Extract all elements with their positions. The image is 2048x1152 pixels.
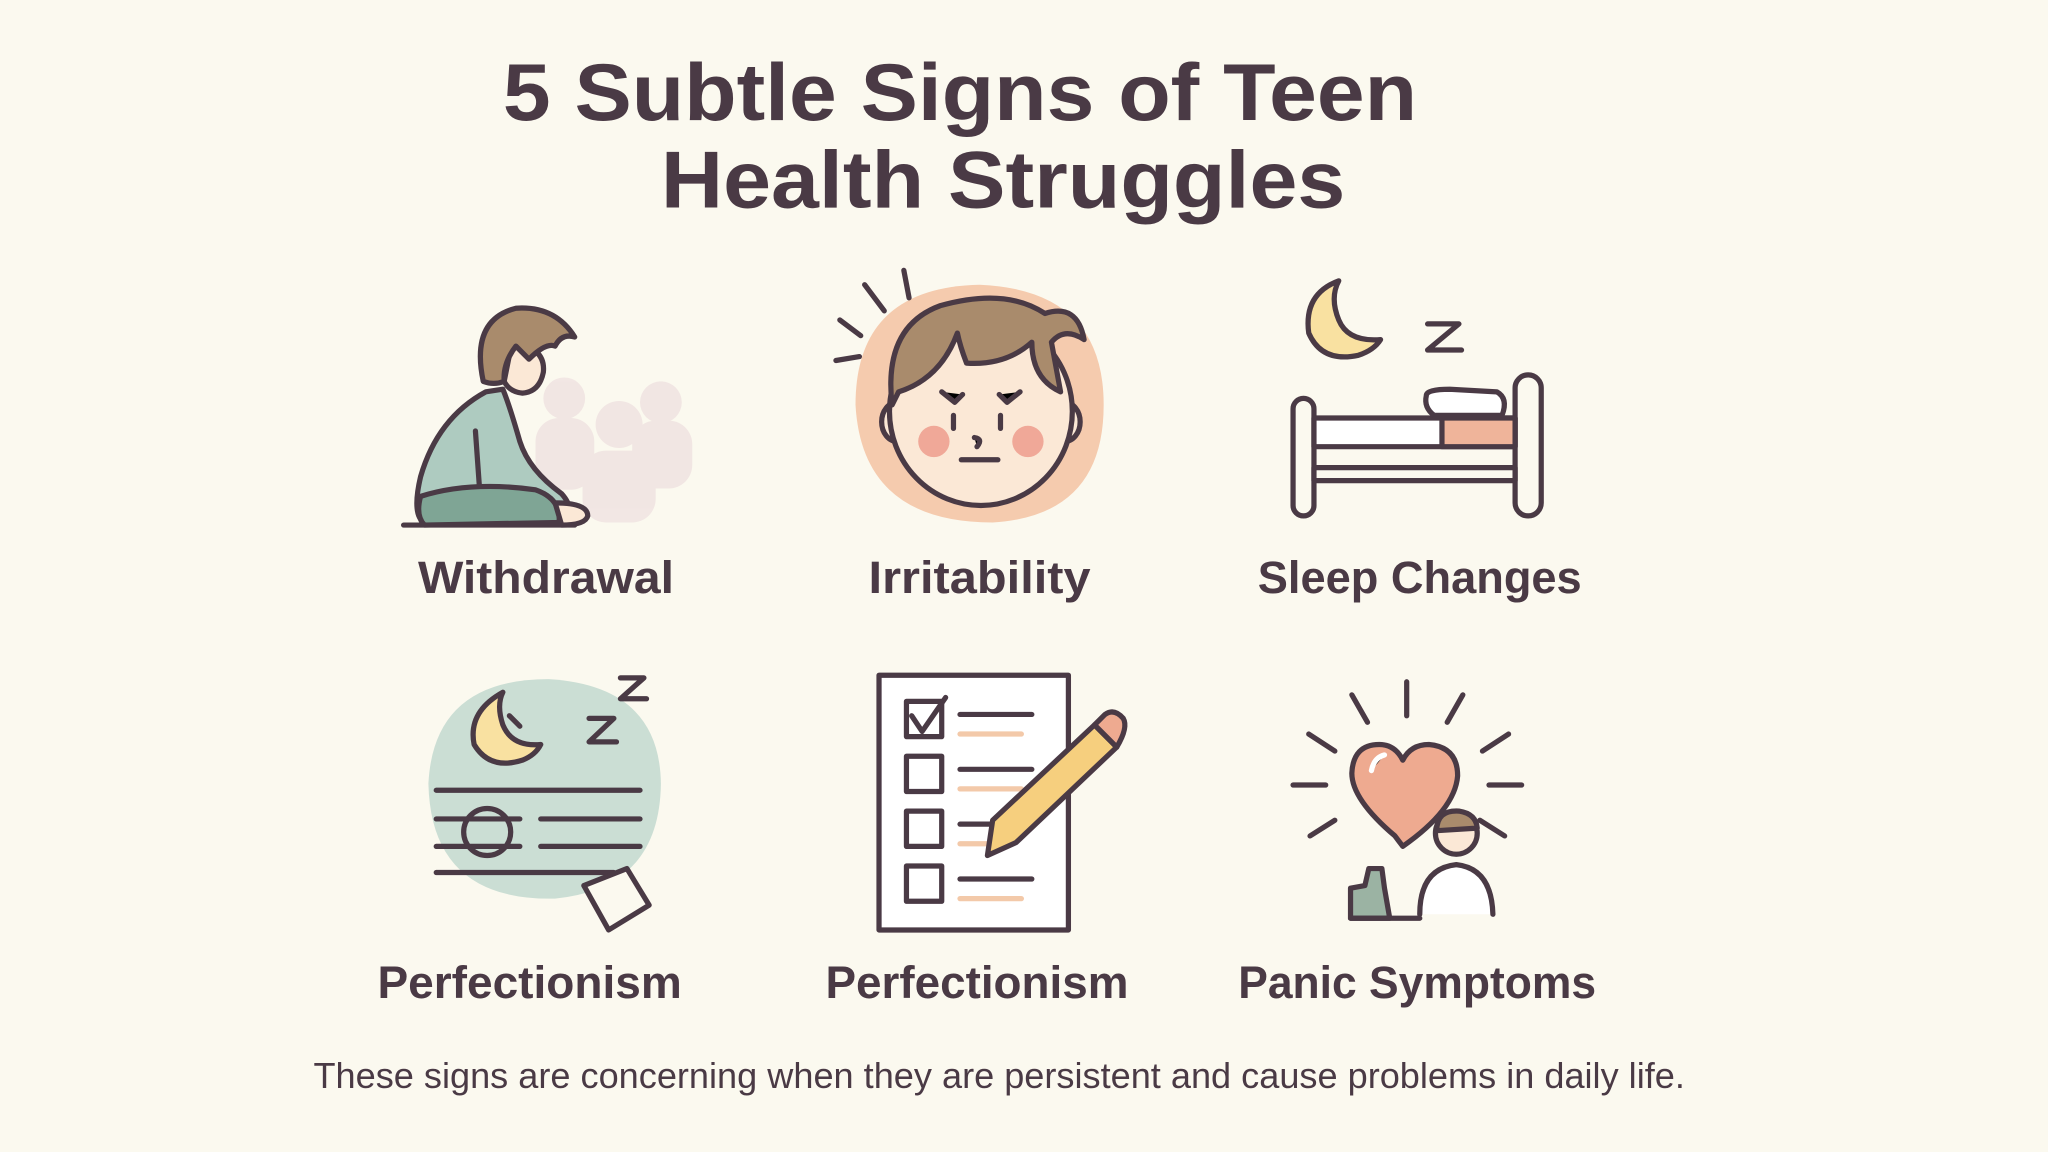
title: 5 Subtle Signs of Teen	[503, 48, 1417, 138]
footer note: These signs are concerning when they are persistent and cause problems in daily life.	[313, 1055, 1685, 1096]
title	[503, 48, 1417, 226]
icon: panic symptoms	[1293, 682, 1522, 918]
icon: checklist	[879, 675, 1125, 930]
label: sleep changes: Sleep Changes	[1258, 552, 1582, 603]
label: withdrawal: Withdrawal	[418, 552, 674, 603]
label: perfectionism 2: Perfectionism	[825, 957, 1128, 1008]
icon: irritability	[836, 270, 1104, 522]
icon: perfectionism (sleep/notes)	[428, 678, 661, 930]
icon: withdrawal	[404, 308, 692, 525]
label: perfectionism 1: Perfectionism	[377, 957, 682, 1008]
label: panic symptoms: Panic Symptoms	[1238, 957, 1596, 1008]
title: Health Struggles	[661, 136, 1345, 226]
label: irritability: Irritability	[869, 552, 1091, 603]
icon: sleep changes	[1293, 281, 1541, 516]
